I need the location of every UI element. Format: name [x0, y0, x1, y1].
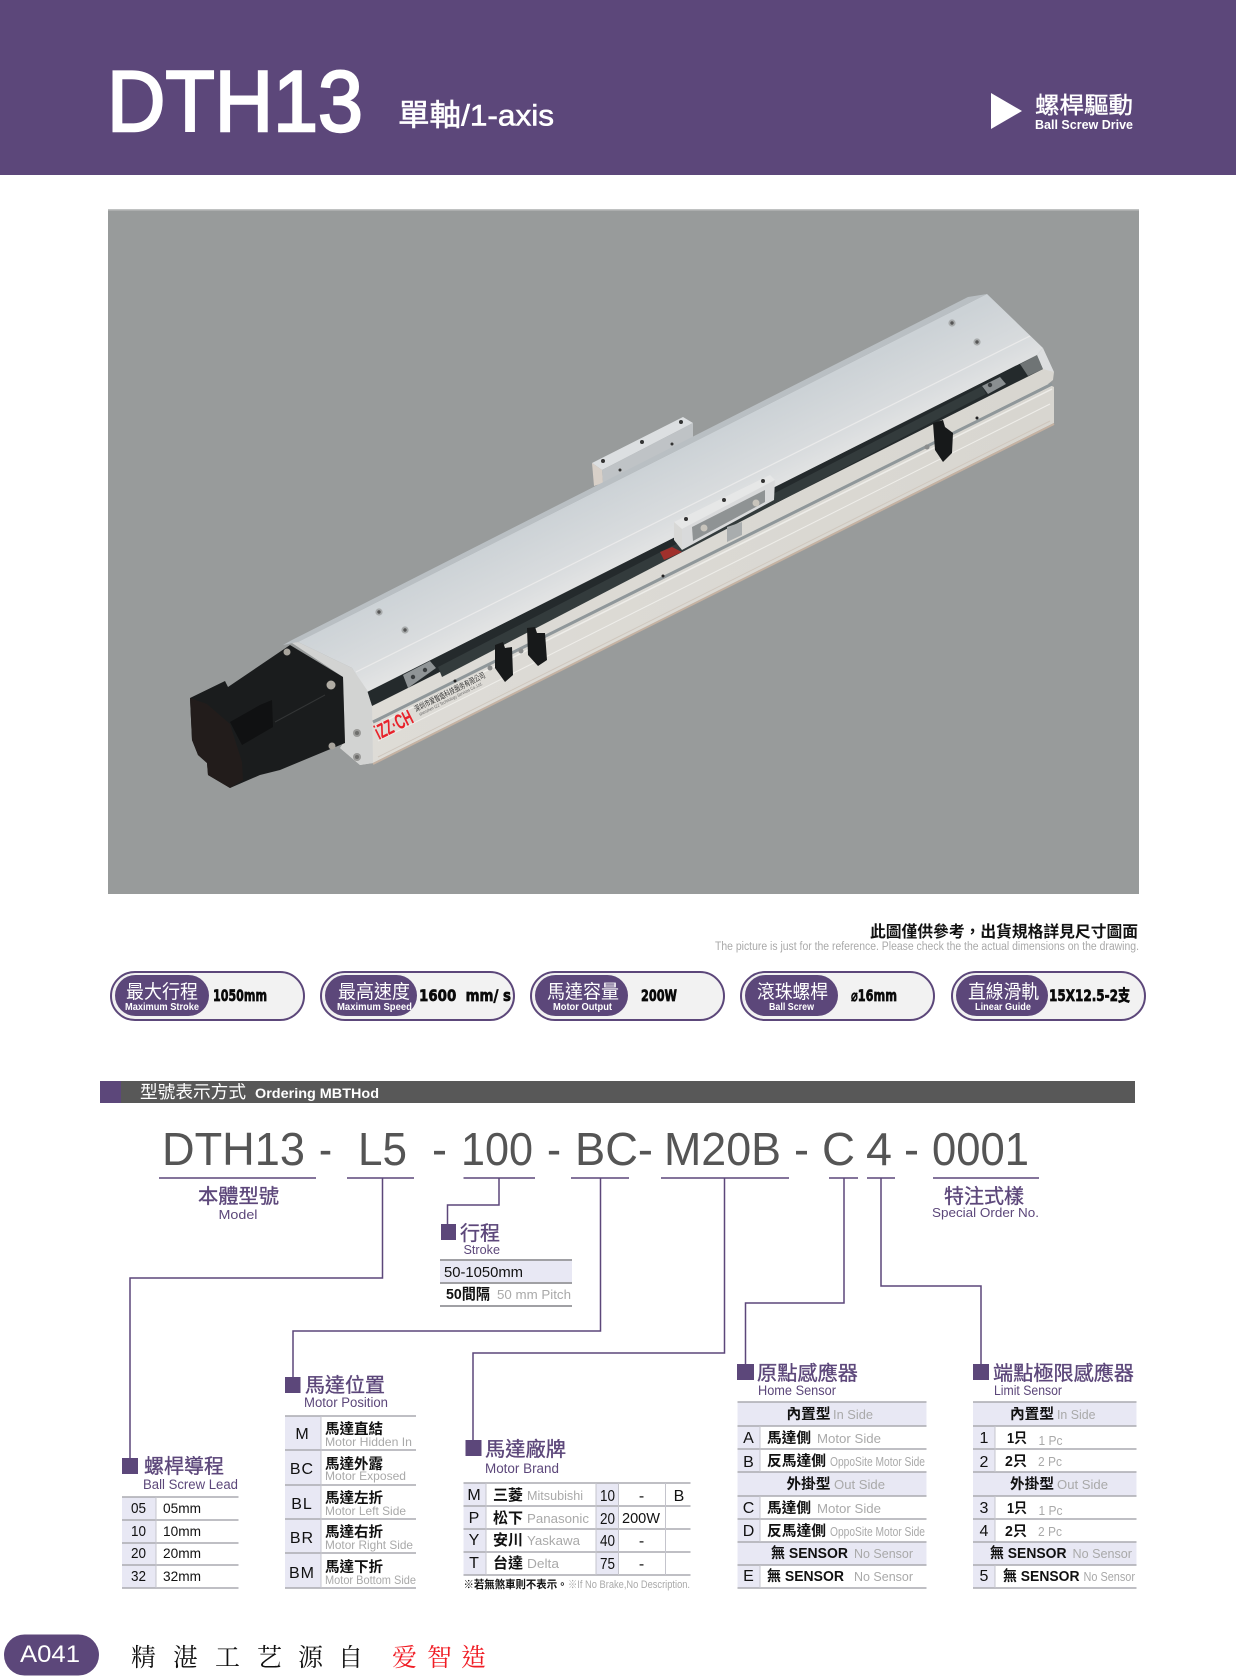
table: limit sensor: Limit Sensor — [994, 1383, 1062, 1398]
table: stroke: 50-1050mm — [444, 1264, 523, 1281]
logo on module: iZZ·CH — [371, 706, 417, 744]
table: motor brand: 40 — [600, 1533, 615, 1550]
table: stroke — [440, 1222, 572, 1306]
pill: maximum speed: 1600 mm/ s — [419, 986, 511, 1005]
icon: drive arrow — [991, 93, 1022, 129]
table: motor brand — [464, 1437, 690, 1591]
ordering code: - — [904, 1123, 919, 1175]
table: limit sensor: 2只 — [1005, 1524, 1027, 1540]
table: motor position: BC — [290, 1461, 314, 1478]
table: home sensor: Home Sensor — [758, 1383, 836, 1398]
table: motor brand: Yaskawa — [527, 1533, 581, 1548]
table: home sensor: No Sensor — [854, 1569, 914, 1584]
table: ball screw lead: 20 — [131, 1545, 146, 1562]
table: motor brand: 20 — [600, 1511, 615, 1528]
title: DTH13 — [107, 54, 363, 150]
carriage — [674, 475, 775, 550]
ordering code: DTH13 — [162, 1123, 305, 1175]
table: home sensor: 反馬達側 — [767, 1523, 826, 1540]
table: motor brand: - — [639, 1533, 644, 1550]
table: home sensor: OppoSite Motor Side — [830, 1454, 925, 1469]
pill: ball screw: ⌀16mm — [851, 986, 897, 1005]
table: ball screw lead: 20mm — [163, 1545, 201, 1561]
table: home sensor: 無 SENSOR — [771, 1544, 849, 1562]
table: motor brand: 台達 — [493, 1554, 523, 1572]
table: motor position: Motor Right Side — [325, 1538, 413, 1552]
product image panel — [108, 209, 1139, 894]
ordering code: BC- — [575, 1123, 653, 1175]
table: limit sensor: 1 Pc — [1038, 1433, 1063, 1448]
table: limit sensor: 2 Pc — [1038, 1454, 1062, 1469]
table: motor brand: P — [469, 1510, 479, 1527]
table: limit sensor: 1只 — [1007, 1501, 1027, 1517]
table: ball screw lead: 32 — [131, 1568, 146, 1585]
pill: ball screw — [741, 972, 934, 1020]
table: home sensor: Motor Side — [817, 1431, 881, 1446]
ordering code: M20B — [664, 1123, 781, 1175]
bracket on back — [592, 417, 693, 486]
label: model: 本體型號 — [198, 1185, 279, 1208]
table: home sensor: C — [743, 1500, 754, 1517]
drive type label: Ball Screw Drive — [1035, 117, 1133, 132]
header band — [0, 0, 1236, 175]
table: stroke: 50 mm Pitch — [497, 1287, 571, 1302]
table: home sensor: Out Side — [834, 1477, 885, 1492]
ordering code — [162, 1123, 1029, 1175]
pill: maximum stroke: 最大行程 — [126, 981, 198, 1003]
label: model: Model — [218, 1207, 258, 1222]
table: motor brand: Panasonic — [527, 1511, 590, 1526]
table: home sensor: OppoSite Motor Side — [830, 1524, 925, 1539]
table: motor position: 馬達外露 — [325, 1456, 383, 1473]
table: home sensor: E — [743, 1568, 754, 1585]
sensors — [488, 420, 953, 682]
table: home sensor: 原點感應器 — [757, 1361, 858, 1385]
table: ball screw lead: 10mm — [163, 1523, 201, 1539]
pill: linear guide — [952, 972, 1145, 1020]
footer slogan: 爱智造 — [392, 1638, 486, 1674]
table: ball screw lead: 05 — [131, 1500, 146, 1517]
table: home sensor: A — [743, 1430, 754, 1447]
far end cap — [1037, 348, 1054, 372]
table: ball screw lead: 螺桿導程 — [144, 1455, 224, 1478]
table: motor brand: Motor Brand — [485, 1461, 559, 1476]
code underlines and connector lines — [130, 1178, 1039, 1458]
picture disclaimer note — [715, 922, 1139, 953]
ordering code: - — [547, 1123, 561, 1175]
ordering code: L5 — [358, 1123, 407, 1175]
section heading bar — [100, 1081, 1135, 1103]
ordering code: C — [822, 1123, 855, 1175]
table: motor brand: Y — [469, 1532, 480, 1549]
table: motor brand: - — [639, 1488, 644, 1505]
table: limit sensor: 3 — [980, 1500, 989, 1517]
footer page tag: A041 — [20, 1641, 80, 1668]
table: motor position: BR — [290, 1530, 314, 1547]
drive type label: 螺桿驅動 — [1035, 92, 1133, 118]
ordering code: 100 — [461, 1123, 533, 1175]
label: special order: Special Order No. — [932, 1205, 1039, 1220]
logo on module: shenzhen IZZ Technology Services Co.,Ltd. — [418, 681, 483, 717]
top ledge — [283, 294, 987, 645]
picture disclaimer note: 此圖僅供參考，出貨規格詳見尺寸圖面 — [870, 922, 1138, 941]
table: limit sensor: No Sensor — [1072, 1546, 1133, 1561]
ordering code: - — [319, 1123, 332, 1175]
table: motor position: Motor Position — [304, 1395, 388, 1410]
table: motor position: 馬達直結 — [325, 1420, 383, 1438]
table: limit sensor: Out Side — [1057, 1477, 1108, 1492]
ordering code: - — [432, 1123, 447, 1175]
lower body — [340, 362, 1054, 765]
pill: maximum stroke — [111, 972, 304, 1020]
table: motor position: Motor Left Side — [325, 1504, 406, 1518]
pill: linear guide: 直線滑軌 — [968, 981, 1039, 1003]
rail groove — [373, 384, 1052, 722]
table: motor brand: M — [467, 1487, 481, 1504]
pill: maximum stroke: 1050mm — [213, 986, 267, 1005]
table: home sensor: 馬達側 — [767, 1500, 811, 1517]
table: home sensor: No Sensor — [854, 1546, 914, 1561]
label: special order — [932, 1185, 1039, 1220]
logo on module: 深圳市爱智造科技服务有限公司 — [412, 670, 487, 714]
pill: linear guide: Linear Guide — [975, 1002, 1031, 1013]
table: motor position: Motor Exposed — [325, 1469, 406, 1483]
table: limit sensor: 內置型 — [1010, 1406, 1054, 1423]
table: stroke: 行程 — [460, 1222, 500, 1245]
table: home sensor: 內置型 — [786, 1406, 830, 1423]
table: ball screw lead: 05mm — [163, 1500, 201, 1516]
ordering code: 4 — [866, 1123, 892, 1175]
near end cap — [292, 642, 373, 765]
table: home sensor: 無 SENSOR — [767, 1567, 845, 1585]
ball screw module body — [283, 294, 1054, 765]
slot — [367, 355, 1043, 706]
table: home sensor: B — [743, 1454, 754, 1471]
pill: motor output — [531, 972, 724, 1020]
table: motor brand: 200W — [622, 1510, 661, 1527]
table: home sensor: 外掛型 — [786, 1475, 830, 1493]
table: limit sensor: 5 — [980, 1568, 989, 1585]
footer page tag — [4, 1634, 99, 1676]
table: ball screw lead: 10 — [131, 1523, 146, 1540]
ordering code: 0001 — [932, 1123, 1029, 1175]
table: motor brand: 馬達廠牌 — [485, 1437, 566, 1461]
table: motor position: 馬達位置 — [305, 1374, 385, 1397]
table: motor brand: 10 — [600, 1488, 615, 1505]
table: motor brand: 三菱 — [493, 1487, 523, 1504]
pill: maximum stroke: Maximum Stroke — [125, 1002, 199, 1013]
table: home sensor — [737, 1361, 926, 1588]
table: motor brand: T — [469, 1555, 479, 1572]
table: limit sensor: 1只 — [1007, 1431, 1027, 1447]
table: home sensor: D — [743, 1523, 754, 1540]
table: limit sensor: 端點極限感應器 — [993, 1361, 1134, 1385]
table: motor position: BL — [291, 1496, 313, 1513]
table: motor position — [285, 1374, 416, 1588]
pill: ball screw: Ball Screw — [769, 1002, 814, 1013]
motor — [190, 645, 345, 788]
pill: motor output: Motor Output — [553, 1002, 613, 1013]
label: model — [198, 1185, 279, 1222]
section heading bar: 型號表示方式 — [140, 1082, 246, 1102]
table: limit sensor: 2 — [980, 1454, 989, 1471]
pill: motor output: 馬達容量 — [547, 981, 619, 1003]
logo on module — [371, 670, 487, 744]
table: limit sensor: 2 Pc — [1038, 1524, 1062, 1539]
bolts — [353, 319, 981, 761]
picture disclaimer note: The picture is just for the reference. Please check the the actual dimensions on the drawing. — [715, 941, 1139, 953]
table: limit sensor: 4 — [980, 1523, 989, 1540]
table: motor brand: Delta — [527, 1556, 560, 1571]
spec pills — [111, 972, 1145, 1020]
table: motor brand: - — [639, 1556, 644, 1573]
subtitle: 單軸/1-axis — [398, 100, 554, 132]
table: limit sensor: 1 Pc — [1038, 1503, 1063, 1518]
table: limit sensor: 1 — [980, 1430, 989, 1447]
table: limit sensor: 無 SENSOR — [990, 1544, 1067, 1562]
table: ball screw lead — [122, 1455, 238, 1588]
table: limit sensor: In Side — [1057, 1407, 1096, 1422]
table: limit sensor: 外掛型 — [1010, 1475, 1054, 1493]
table: home sensor: Motor Side — [817, 1501, 881, 1516]
table: limit sensor: No Sensor — [1084, 1569, 1136, 1584]
table: motor brand: ※若無煞車則不表示。 — [464, 1577, 568, 1591]
table: home sensor: 反馬達側 — [767, 1453, 826, 1470]
table: motor brand: 安川 — [493, 1531, 523, 1549]
footer slogan — [131, 1638, 486, 1674]
pill: ball screw: 滾珠螺桿 — [757, 981, 828, 1003]
pill: linear guide: 15X12.5-2支 — [1049, 986, 1130, 1005]
table: motor position: 馬達下折 — [325, 1558, 383, 1576]
table: motor position: Motor Hidden In — [325, 1435, 412, 1449]
pill: maximum speed: 最高速度 — [338, 981, 410, 1003]
table: stroke: Stroke — [464, 1242, 500, 1257]
label: special order: 特注式樣 — [944, 1185, 1024, 1208]
table: motor position: Motor Bottom Side — [325, 1573, 416, 1587]
table: motor position: M — [295, 1426, 309, 1443]
pill: motor output: 200W — [641, 986, 677, 1005]
table: motor brand: 75 — [600, 1556, 615, 1573]
table: limit sensor: 無 SENSOR — [1003, 1567, 1080, 1585]
table: motor position: BM — [289, 1565, 315, 1582]
top face — [298, 294, 1043, 692]
table: motor position: 馬達左折 — [325, 1489, 383, 1507]
drive type label — [1035, 92, 1133, 132]
section heading bar: Ordering MBTHod — [255, 1085, 379, 1101]
table: motor brand: B — [674, 1488, 684, 1505]
ordering code: - — [794, 1123, 809, 1175]
pill: maximum speed — [321, 972, 514, 1020]
pill: maximum speed: Maximum Speed — [337, 1002, 412, 1013]
table: motor brand: Mitsubishi — [527, 1488, 583, 1503]
table: motor brand: ※If No Brake,No Description. — [568, 1579, 690, 1591]
table: motor position: 馬達右折 — [325, 1523, 383, 1541]
table: ball screw lead: 32mm — [163, 1568, 201, 1584]
table: home sensor: In Side — [833, 1407, 873, 1422]
table: limit sensor — [973, 1361, 1136, 1588]
table: ball screw lead: Ball Screw Lead — [143, 1477, 238, 1492]
table: home sensor: 馬達側 — [767, 1430, 811, 1447]
footer slogan: 精湛工艺源自 — [131, 1638, 363, 1674]
table: limit sensor: 2只 — [1005, 1454, 1027, 1470]
table: stroke: 50間隔 — [446, 1286, 490, 1303]
table: motor brand: 松下 — [493, 1510, 523, 1527]
